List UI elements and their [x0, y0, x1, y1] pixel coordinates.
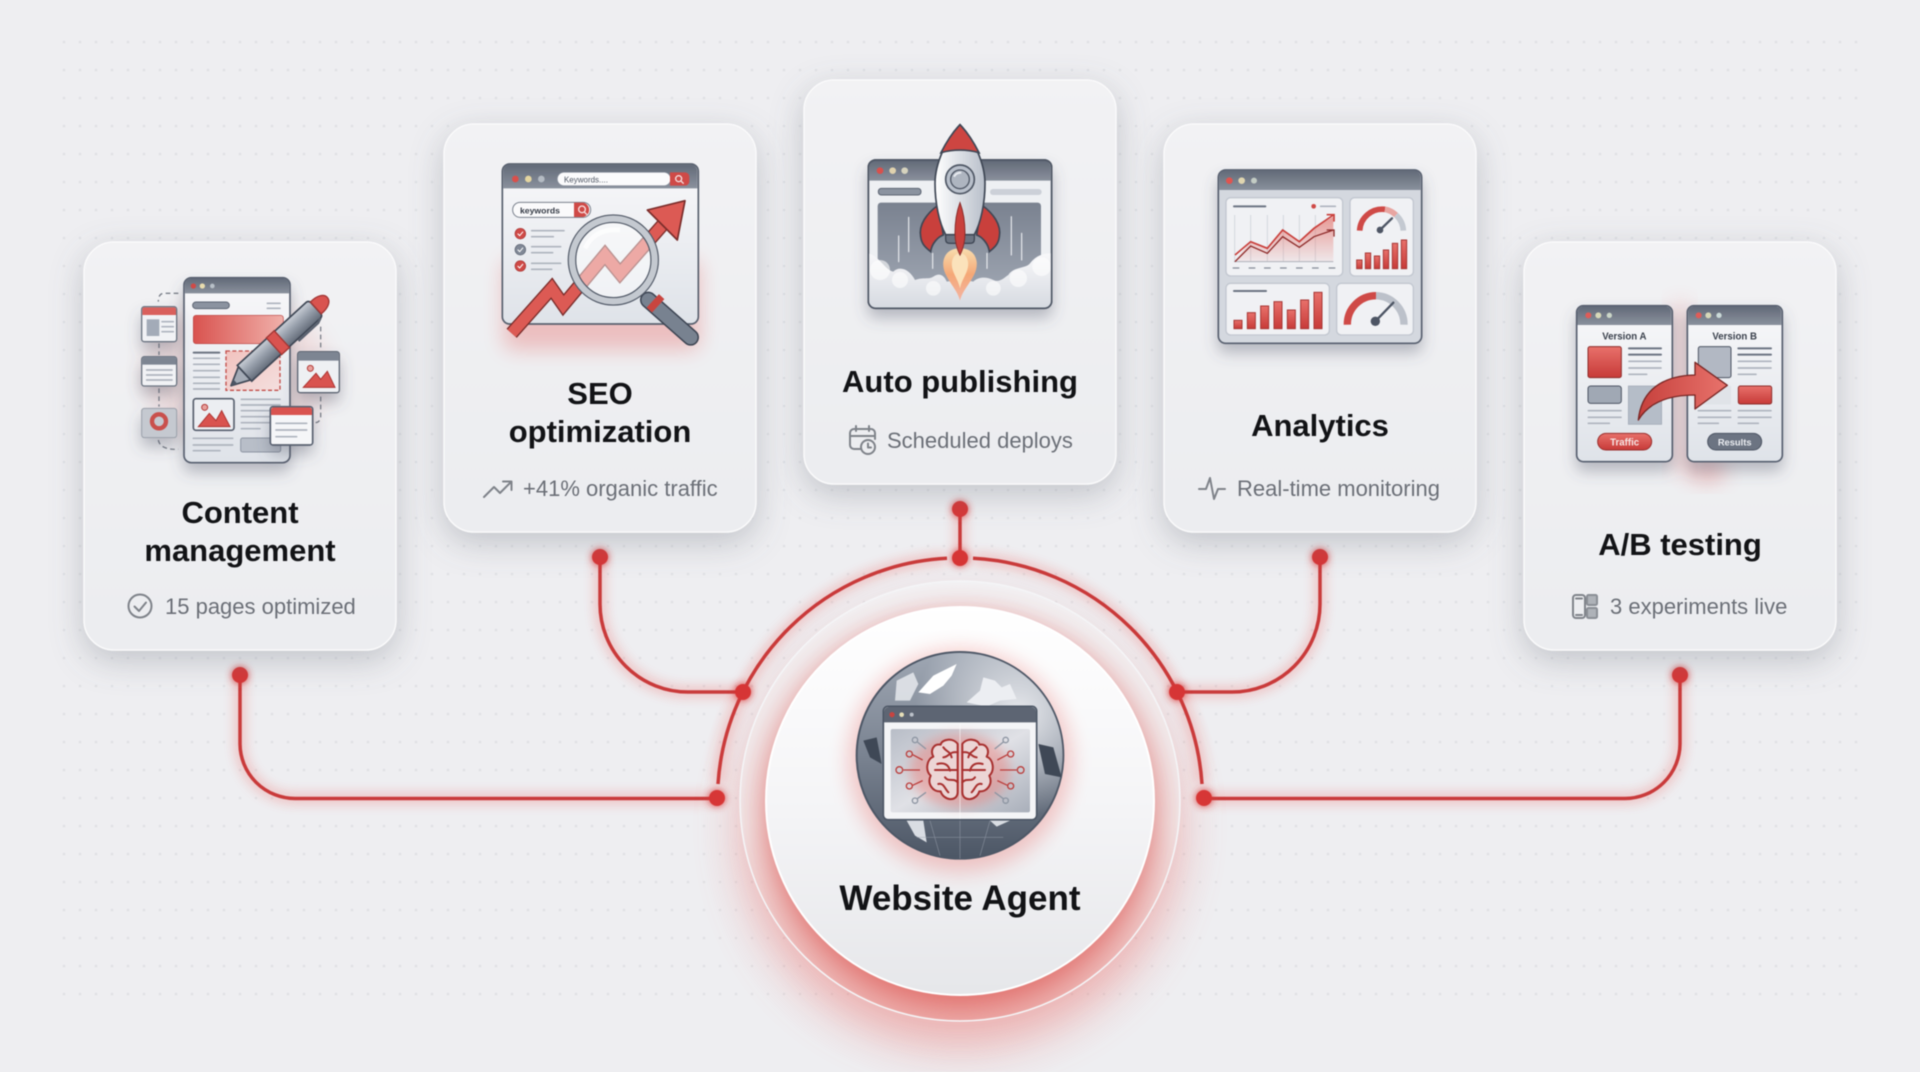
hub ring — [740, 581, 1180, 1021]
version A layout — [1588, 347, 1621, 378]
arc around hub — [718, 558, 1202, 784]
illustration: search window with growth arrow: keywords — [520, 205, 560, 215]
card: A/B testing — [1524, 242, 1836, 650]
curved arrow — [1638, 362, 1727, 420]
icon: trend arrow — [484, 482, 512, 497]
arrow — [512, 223, 664, 333]
card title: Auto publishing — [842, 364, 1078, 399]
pen — [223, 289, 336, 395]
floating cards — [142, 307, 339, 445]
illustration: content editor and pen — [142, 278, 339, 463]
stat: 3 experiments live — [1610, 594, 1787, 619]
connector nodes — [232, 501, 1688, 806]
small gauge — [1360, 209, 1385, 231]
illustration: rocket launching from browser — [868, 125, 1052, 310]
stat: Scheduled deploys — [887, 428, 1073, 453]
hull — [935, 125, 985, 235]
illustration: search window with growth arrow — [502, 164, 700, 350]
hub disc shadow — [763, 615, 1157, 1009]
icon: calendar clock — [850, 426, 875, 454]
magnifier — [648, 300, 691, 337]
illustration: A/B variants: Version A — [1602, 331, 1646, 342]
icon: activity pulse — [1199, 478, 1225, 499]
connector: SEO optimization — [600, 557, 743, 692]
illustration: search window with growth arrow: Keywords.... — [564, 175, 608, 184]
card title: optimization — [509, 414, 691, 449]
stat: +41% organic traffic — [523, 476, 718, 501]
connectors — [232, 501, 1688, 806]
card title: Content — [181, 495, 299, 530]
hub outer glow — [742, 610, 1178, 1046]
illustration: A/B variants — [1577, 303, 1782, 483]
illustration: A/B variants: Traffic — [1610, 437, 1640, 448]
flame — [943, 248, 977, 301]
card: content management — [84, 242, 396, 650]
card: auto publishing — [804, 80, 1116, 484]
hub title: Website Agent — [839, 879, 1081, 918]
icon: check circle — [128, 594, 152, 618]
connector: A/B testing — [1204, 675, 1680, 798]
card title: A/B testing — [1598, 527, 1762, 562]
card title: management — [144, 533, 336, 568]
card title: Analytics — [1251, 408, 1389, 443]
version B layout — [1698, 347, 1731, 378]
clouds — [868, 253, 1052, 310]
fins — [920, 205, 943, 252]
connector: auto publishing — [958, 509, 962, 558]
hub globe illustration — [848, 649, 1072, 872]
illustration: A/B variants: Version B — [1712, 331, 1757, 342]
neural nodes — [896, 751, 1024, 789]
hub: Website Agent — [740, 581, 1180, 1046]
card: analytics — [1164, 124, 1476, 532]
card: SEO optimization — [444, 124, 756, 532]
stat: Real-time monitoring — [1237, 476, 1440, 501]
hub disc — [766, 607, 1154, 995]
large gauge — [1347, 296, 1376, 325]
illustration: analytics dashboard — [1218, 170, 1422, 343]
panels — [1226, 198, 1413, 335]
connector glow — [240, 509, 1680, 798]
small bars — [1234, 240, 1407, 329]
connector: content management — [240, 675, 716, 798]
browser window — [883, 706, 1037, 820]
brain — [927, 740, 993, 799]
connector: analytics — [1177, 557, 1320, 692]
stat: 15 pages optimized — [165, 594, 356, 619]
icon: device and tiles — [1573, 595, 1597, 618]
card title: SEO — [567, 376, 633, 411]
illustration: A/B variants: Results — [1718, 437, 1752, 447]
